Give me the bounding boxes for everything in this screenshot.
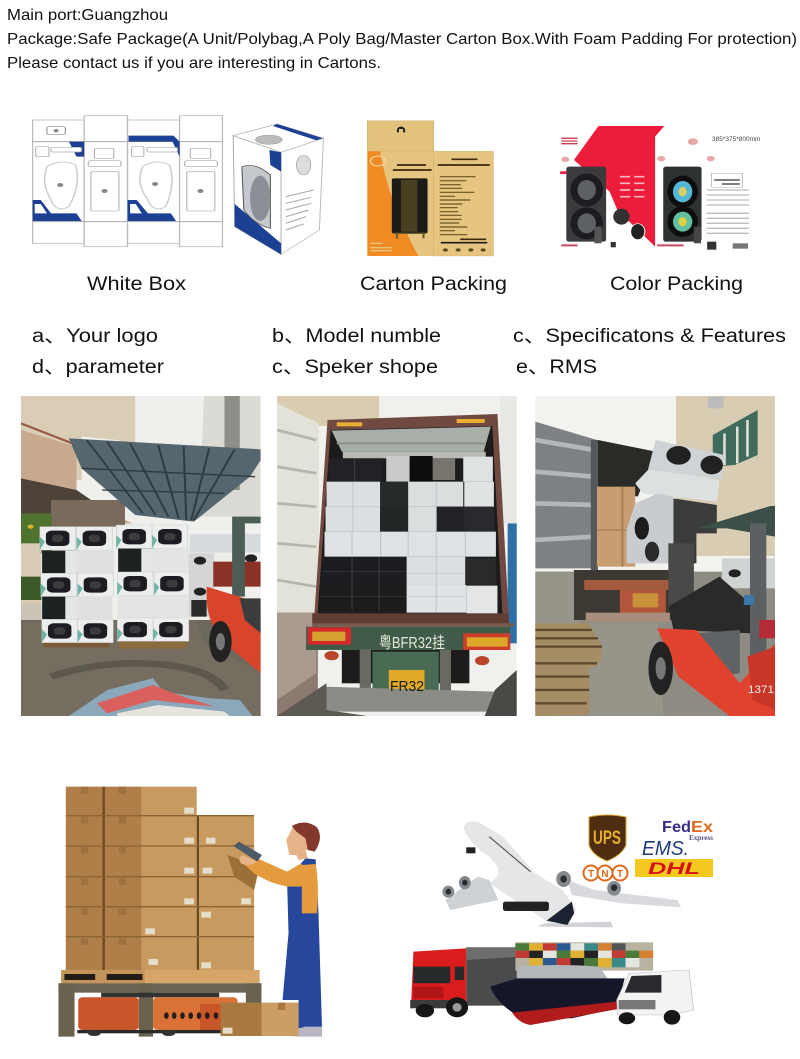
icon: truck <box>410 947 521 1017</box>
logo: FedEx <box>662 819 713 842</box>
caption: color packing: Color Packing <box>610 274 743 295</box>
logo: FedEx: Ex <box>691 819 713 836</box>
boxes right pallet <box>116 525 190 641</box>
icon: carton dieline <box>367 121 493 256</box>
package line: Package:Safe Package(A Unit/Polybag,A Poly Bag/Master Carton Box.With Foam Padding For protection) <box>7 31 797 48</box>
size label: 385*375*800mm <box>712 136 760 143</box>
icon: white box dieline <box>33 116 222 247</box>
stacked cartons <box>66 787 260 970</box>
cartons in truck <box>597 487 635 567</box>
undercarriage <box>342 650 469 683</box>
item c second: c、Speker shope <box>272 357 438 378</box>
logo: DHL <box>635 859 713 878</box>
item a: a、Your logo <box>32 326 158 347</box>
rear bumper sign <box>306 627 510 650</box>
sign plate text: 粤BFR32挂 <box>379 633 445 652</box>
caption: carton packing: Carton Packing <box>360 274 507 295</box>
item d: d、parameter <box>32 357 165 378</box>
worker <box>233 822 322 1037</box>
ground and truck <box>535 572 775 716</box>
intro text block <box>7 7 797 72</box>
panel: white box packaging <box>33 116 323 295</box>
floor carton <box>221 1003 299 1036</box>
panel: color packing <box>560 126 760 295</box>
item b: b、Model numble <box>272 326 441 347</box>
illustration: warehouse worker scanning boxes <box>58 787 322 1037</box>
item c: c、Specificatons & Features <box>513 326 786 347</box>
container side <box>535 422 597 568</box>
license plate text: FR32 <box>390 678 424 695</box>
logo: FedEx: Fed <box>662 819 691 836</box>
icon: airplane <box>442 821 681 927</box>
caption: white box: White Box <box>87 274 187 295</box>
photo: loaded container rear view <box>277 396 517 716</box>
icon: white box 3D <box>233 124 323 254</box>
icon: container ship <box>490 942 653 1025</box>
panel: carton packing <box>360 121 507 295</box>
pallet and robot <box>58 970 261 1037</box>
main port line: Main port:Guangzhou <box>7 7 168 24</box>
cartons in container <box>320 456 497 614</box>
illustration: shipping transport collage <box>410 815 713 1025</box>
forklift <box>696 506 775 537</box>
item e: e、RMS <box>516 357 597 378</box>
forklift <box>213 562 261 587</box>
container frame <box>314 414 509 623</box>
logo: TNT <box>584 866 628 880</box>
background boxes <box>722 558 775 588</box>
list: printing options <box>32 326 786 378</box>
logo: EMS: EMS. <box>642 838 689 860</box>
forklift phone number: 1371 <box>748 684 774 696</box>
contact line: Please contact us if you are interesting in Cartons. <box>7 55 381 72</box>
boxes left pallet <box>40 527 114 643</box>
logo: UPS: UPS <box>593 828 621 849</box>
logo: TNT: T <box>588 869 594 880</box>
logo: UPS <box>589 815 626 861</box>
icon: color box dieline <box>560 126 749 250</box>
icon: white van <box>617 970 694 1025</box>
logo: TNT: T <box>617 869 623 880</box>
logo: DHL: DHL <box>648 859 700 878</box>
photo: forklift loading truck <box>535 396 775 716</box>
logo: TNT: N <box>601 869 609 880</box>
speaker boxes on fork <box>627 440 724 563</box>
tarp <box>69 678 253 716</box>
logo: FedEx: Express <box>689 834 713 842</box>
photo: pallets of boxes with forklift <box>21 396 261 716</box>
wood pallets <box>535 623 602 716</box>
